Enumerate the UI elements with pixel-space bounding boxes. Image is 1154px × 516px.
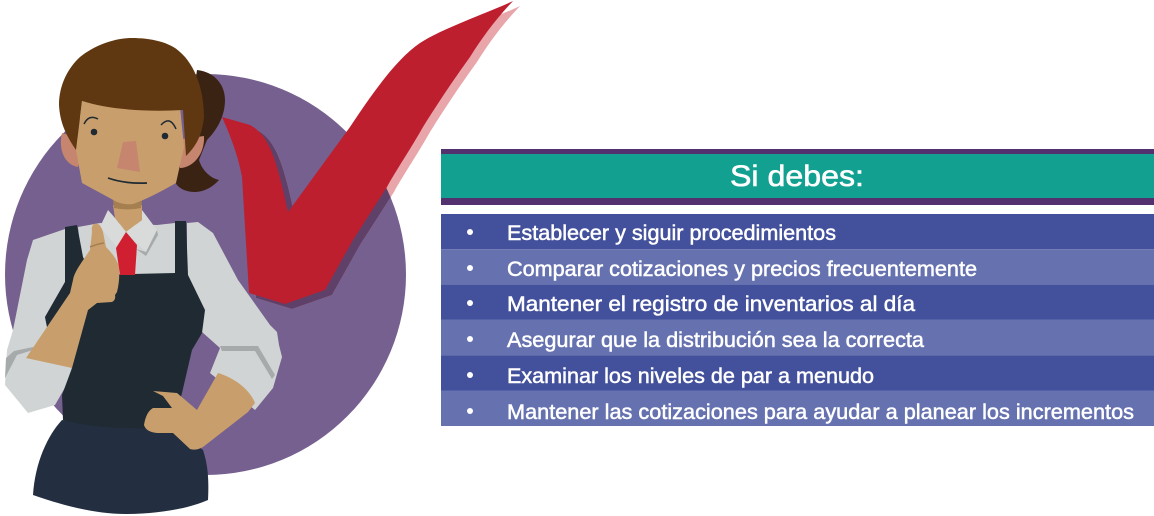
panel: checklist (441, 214, 1154, 426)
right sleeve (187, 222, 282, 410)
row 5: Examinar los niveles de par a menudo (507, 365, 874, 388)
eyes (91, 129, 168, 139)
collar shadow (136, 230, 158, 256)
row 2: Comparar cotizaciones y precios frecuentemente (507, 258, 977, 281)
neck (113, 205, 142, 232)
purple background circle (5, 74, 406, 475)
thumb crease (90, 243, 104, 247)
row 4: Asegurar que la distribución sea la correcta (507, 329, 924, 352)
row 2 (441, 249, 1154, 285)
mouth (108, 178, 147, 183)
eyebrows (84, 117, 176, 129)
row 3: Mantener el registro de inventarios al día (507, 293, 915, 316)
row 6 (441, 390, 1154, 426)
nose (117, 141, 140, 172)
row 1: Establecer y siguir procedimientos (507, 222, 836, 245)
row 3 (441, 285, 1154, 320)
row 1 (441, 214, 1154, 249)
skirt (33, 420, 208, 514)
icon: red check mark (222, 1, 520, 309)
hair bun and ponytail (175, 70, 225, 192)
right ear (175, 136, 204, 168)
row 6: Mantener las cotizaciones para ayudar a planear los incrementos (507, 401, 1134, 424)
right arm and hand on hip (144, 373, 255, 450)
hair (59, 38, 204, 156)
apron (45, 221, 205, 428)
face (76, 101, 184, 204)
row 5 (441, 355, 1154, 390)
shirt torso (78, 223, 175, 276)
left ear (61, 133, 85, 167)
left arm and thumbs up (26, 224, 119, 368)
panel: header (441, 149, 1154, 205)
left sleeve (5, 229, 74, 413)
sleeve folds (5, 346, 275, 379)
heading: Si debes: (730, 160, 864, 193)
neck shadow (113, 200, 142, 210)
figure: waitress (5, 38, 282, 514)
row 4 (441, 320, 1154, 355)
red tie (116, 232, 137, 275)
collar (100, 210, 157, 252)
